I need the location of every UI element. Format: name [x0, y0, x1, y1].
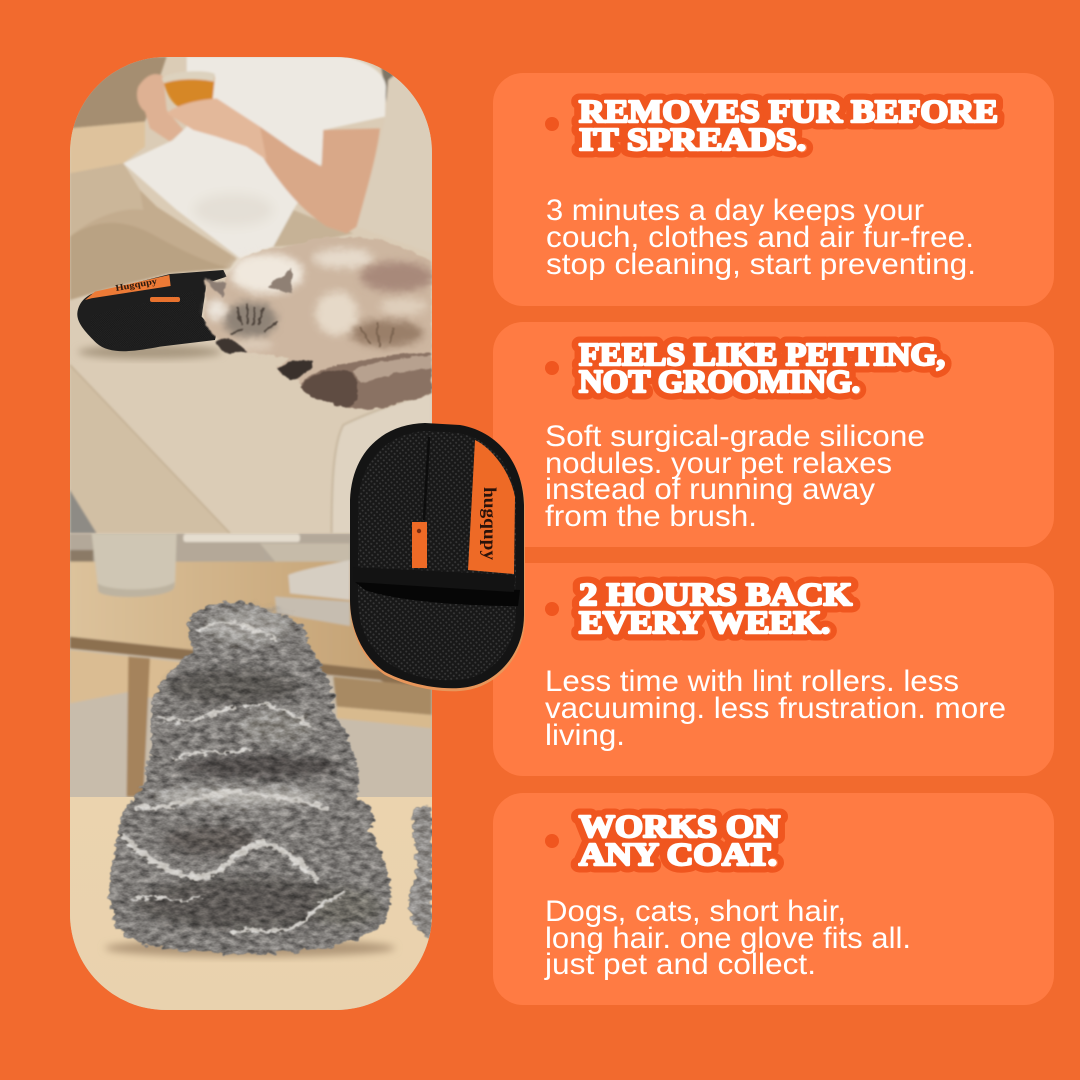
body text [544, 895, 911, 981]
body text [546, 194, 976, 281]
heading: FEELS LIKE PETTING, [579, 336, 945, 372]
body text: Less time with lint rollers. less [545, 665, 959, 698]
bullet dot [545, 602, 559, 616]
body text: nodules. your pet relaxes [545, 447, 892, 480]
heading: 2 HOURS BACK [579, 576, 852, 612]
glove pocket shadow [355, 582, 520, 606]
body text [545, 420, 925, 533]
glove band [353, 567, 515, 592]
heading: IT SPREADS. [579, 121, 806, 157]
heading: REMOVES FUR BEFORE [579, 93, 998, 129]
icon: glove on sofa: Hugqupy [115, 276, 158, 293]
body text: Soft surgical-grade silicone [545, 420, 925, 453]
bullet dot [545, 117, 559, 131]
heading: ANY COAT. [579, 836, 777, 872]
body text: just pet and collect. [544, 948, 816, 981]
photo: person and sleeping cat on sofa [70, 57, 433, 534]
heading: ANY COAT. [579, 836, 777, 872]
body text: from the brush. [545, 500, 757, 533]
icon: glove on sofa [77, 270, 227, 359]
heading [579, 336, 945, 399]
photo: pile of pet fur on table [70, 534, 433, 1010]
panel: photo collage [70, 57, 433, 1010]
heading: NOT GROOMING. [579, 363, 860, 399]
body text: long hair. one glove fits all. [545, 922, 911, 955]
card: works on any coat [493, 793, 1054, 1005]
heading: IT SPREADS. [579, 121, 806, 157]
body text: couch, clothes and air fur-free. [546, 221, 974, 254]
glove seam [424, 437, 429, 520]
heading: FEELS LIKE PETTING, [579, 336, 945, 372]
glove orange tag: hugqupy [480, 487, 500, 560]
heading: WORKS ON [579, 808, 780, 844]
body text: living. [545, 719, 625, 752]
heading: NOT GROOMING. [579, 363, 860, 399]
heading: EVERY WEEK. [579, 604, 830, 640]
body text: Dogs, cats, short hair, [545, 895, 846, 928]
body text: instead of running away [545, 473, 875, 506]
glove orange tag [468, 440, 515, 574]
card: removes fur [493, 73, 1054, 306]
glove zipper pull [412, 522, 427, 568]
photo element: fur pile [110, 602, 432, 953]
heading [579, 93, 998, 157]
heading: WORKS ON [579, 808, 780, 844]
heading: EVERY WEEK. [579, 604, 830, 640]
photo element: cat [203, 237, 433, 410]
body text: 3 minutes a day keeps your [546, 194, 924, 227]
card: feels like petting [493, 322, 1054, 547]
bullet dot [545, 361, 559, 375]
heading: 2 HOURS BACK [579, 576, 852, 612]
bullet dot [545, 834, 559, 848]
body text [545, 665, 1006, 752]
heading [579, 576, 852, 640]
body text: vacuuming. less frustration. more [545, 692, 1006, 725]
heading: REMOVES FUR BEFORE [579, 93, 998, 129]
card: two hours back [493, 563, 1054, 776]
heading [579, 808, 780, 872]
body text: stop cleaning, start preventing. [546, 248, 976, 281]
icon: grooming glove product [350, 423, 525, 691]
